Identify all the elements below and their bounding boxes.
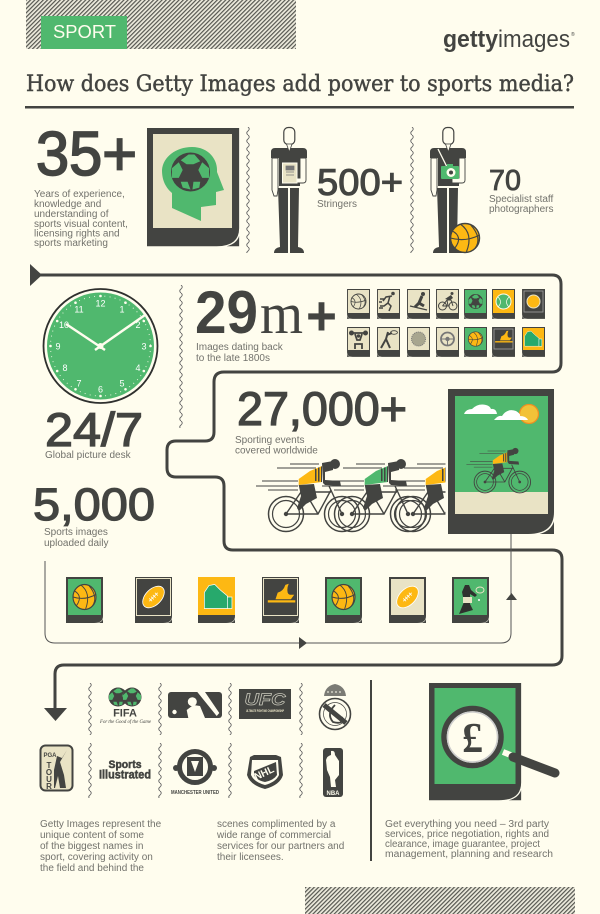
logo: PGA Tour: T	[47, 761, 52, 770]
logo: Sports Illustrated	[99, 759, 151, 782]
logo: PGA Tour: O	[46, 768, 52, 777]
stat: 35+ years: Years of experience,	[34, 189, 125, 200]
body text: partners column 2: services for our partners and	[217, 841, 344, 852]
clock: 24/7: 6	[98, 384, 103, 394]
body text: partners column 2: scenes complimented by a	[217, 819, 336, 830]
stat: 500+ stringers: 500+	[317, 162, 403, 203]
body text: partners column 1: Getty Images represent the	[40, 819, 162, 830]
body text: services: services, price negotiation, rights and	[385, 829, 549, 840]
clock: 24/7: 2	[135, 320, 141, 330]
stat: 35+ years: sports visual content,	[34, 219, 128, 230]
tablet: magnifying glass with pound sign	[429, 683, 555, 800]
figure: stringer with clipboard	[271, 128, 307, 253]
stat: 35+ years: 35+	[36, 120, 137, 189]
logo: MLB	[168, 692, 222, 718]
header hatched band	[26, 0, 296, 49]
logo: NBA: NBA	[326, 791, 340, 797]
logo: Real Madrid	[320, 684, 350, 730]
stat: 35+ years: understanding of	[34, 209, 109, 220]
logo: PGA Tour: R	[46, 782, 52, 791]
stat: 24/7: Global picture desk	[45, 450, 132, 461]
logo: NBA	[323, 748, 343, 797]
body text: partners column 1: unique content of some	[40, 830, 144, 841]
stat: 35+ years: knowledge and	[34, 199, 101, 210]
stat: 5,000	[33, 479, 155, 549]
stat: 29m+: Images dating back	[196, 342, 284, 353]
stat: 27,000+: covered worldwide	[235, 446, 318, 456]
stat: 70 photographers: photographers	[489, 204, 554, 215]
figure: photographer with camera and basketball	[430, 128, 480, 253]
logo: PGA Tour	[40, 746, 72, 791]
stat: 29m+: to the late 1800s	[196, 353, 270, 364]
stat: 35+ years: licensing rights and	[34, 228, 120, 240]
tablet row: uploaded images	[66, 577, 489, 623]
thin upload loop line with arrows	[45, 534, 517, 649]
stat: 29m+: 29	[195, 279, 258, 346]
clock: 24/7: 1	[119, 304, 125, 314]
stat: 35+ years	[34, 120, 137, 249]
stat: 5,000: 5,000	[33, 479, 155, 530]
logo: UFC: ULTIMATE FIGHTING CHAMPIONSHIP	[246, 709, 284, 713]
logo: FIFA: FIFA	[113, 708, 137, 720]
clock: 24/7: 7	[76, 378, 82, 388]
gettyimages logo	[443, 26, 575, 53]
clock: 24/7: 10	[59, 320, 69, 330]
body text: partners column 2: their licensees.	[217, 852, 284, 863]
logo: UFC: UFC	[244, 690, 286, 709]
icon grid: sports	[347, 289, 545, 357]
body text: partners column 2: wide range of commercial	[216, 830, 331, 841]
body text: partners column 1: the field and behind the	[40, 863, 144, 874]
stat: 29m+: m	[260, 281, 303, 346]
clock: 24/7: 11	[74, 304, 84, 314]
body text: services: Get everything you need – 3rd party	[385, 819, 549, 830]
body text: services: management, planning and research	[385, 849, 553, 860]
body text: services: clearance, image guarantee, project	[385, 839, 540, 850]
stat: 29m+: +	[306, 284, 337, 347]
logo: NHL	[247, 755, 283, 789]
body text: partners column 1: sport, covering activity on	[40, 852, 153, 863]
logo: Sports Illustrated: Sports	[108, 759, 142, 771]
icon: tablet with head and football	[147, 128, 239, 246]
logo: PGA Tour: U	[46, 775, 52, 784]
stat: 29m+	[195, 279, 337, 364]
clock: 24/7: 3	[141, 342, 147, 352]
body text: partners column 1: of the biggest names in	[40, 841, 143, 852]
title: How does Getty Images add power to sports media?	[26, 72, 574, 97]
cyclists	[256, 459, 446, 532]
sport label	[41, 16, 127, 49]
logo: Manchester United	[171, 752, 219, 796]
gettyimages logo: getty	[443, 26, 499, 53]
clock: 24/7: 5	[119, 378, 125, 388]
clock: 24/7: 8	[62, 363, 68, 373]
sport label: SPORT	[53, 21, 116, 42]
footer hatched band	[305, 887, 575, 914]
stat: 5,000: Sports images	[44, 527, 108, 538]
stat: 70 photographers: Specialist staff	[489, 194, 554, 205]
stat: 35+ years: sports marketing	[34, 238, 108, 249]
stat: 70 photographers	[489, 165, 554, 215]
logo: UFC	[239, 689, 291, 719]
body text: partners column 1	[40, 819, 162, 874]
tablet: cyclist photo	[448, 389, 554, 534]
stat: 500+ stringers: Stringers	[317, 199, 357, 210]
gettyimages logo: ®	[571, 31, 575, 38]
stat: 24/7: 24/7	[45, 403, 143, 456]
stat: 27,000+	[235, 382, 407, 456]
body text: services	[385, 819, 553, 860]
stat: 5,000: uploaded daily	[44, 538, 108, 549]
logo: PGA Tour: PGA	[43, 753, 57, 759]
logo: NHL: NHL	[253, 764, 276, 783]
stat: 27,000+: 27,000+	[237, 382, 407, 435]
clock: 24/7	[44, 289, 158, 403]
logo: FIFA: For the Good of the Game	[99, 718, 151, 725]
stat: 27,000+: Sporting events	[235, 435, 304, 446]
logo: Sports Illustrated: Illustrated	[99, 768, 151, 782]
logo: FIFA	[99, 688, 151, 725]
logo: Manchester United: MANCHESTER UNITED	[171, 790, 219, 796]
clock: 24/7: 4	[135, 363, 141, 373]
gettyimages logo: images	[498, 26, 570, 53]
clock: 24/7: 9	[55, 342, 61, 352]
stat: 70 photographers: 70	[489, 165, 521, 197]
body text: partners column 2	[216, 819, 344, 863]
clock: 24/7: 12	[95, 298, 106, 308]
tablet: magnifying glass with pound sign: £	[462, 716, 483, 762]
thick route arrow	[30, 264, 562, 721]
